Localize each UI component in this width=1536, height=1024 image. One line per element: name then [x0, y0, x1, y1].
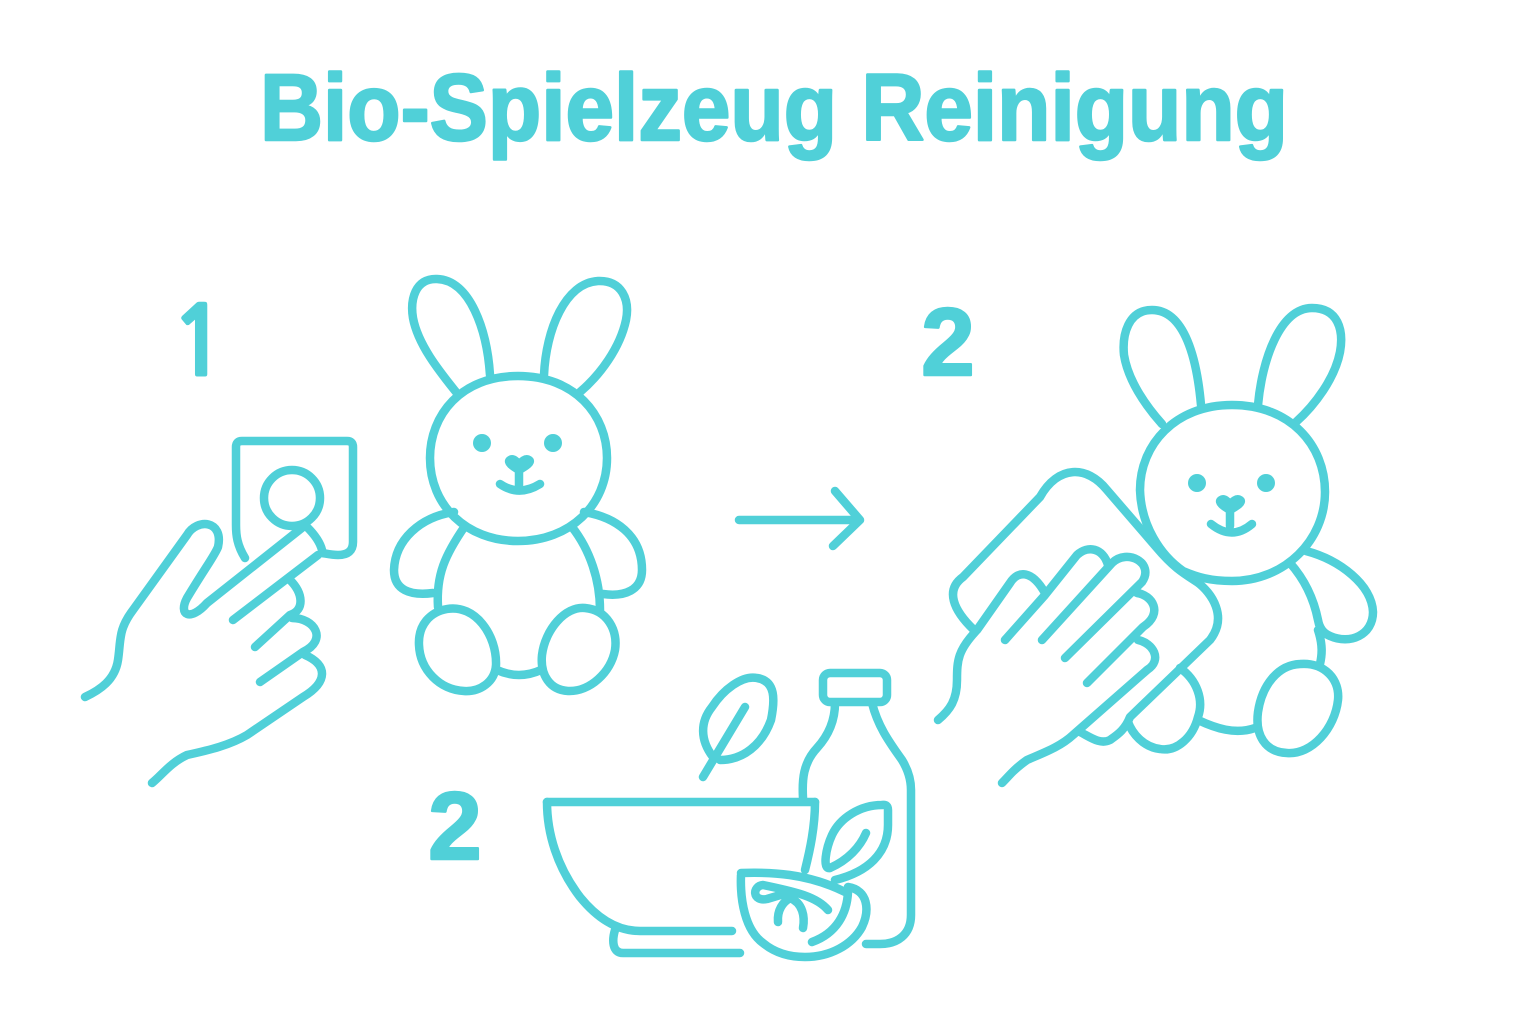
step number 2 bottom: 2	[428, 773, 482, 880]
icon: bunny toy	[394, 279, 642, 691]
bunny body and arms	[394, 512, 642, 675]
bunny feet	[1128, 664, 1338, 753]
bunny ears	[412, 279, 627, 392]
bunny face	[1188, 474, 1275, 532]
bowl	[547, 802, 815, 953]
arrow	[739, 491, 860, 546]
title: Bio-Spielzeug Reinigung	[260, 55, 1288, 161]
card with button	[236, 441, 353, 558]
bottle	[803, 673, 911, 944]
bunny head	[430, 376, 607, 541]
bunny arm and body	[1198, 551, 1373, 731]
hand	[938, 549, 1155, 783]
lemon slice	[741, 873, 866, 957]
step number 2 top right: 2	[921, 289, 975, 396]
step number 1: 1	[170, 295, 228, 390]
hand	[85, 524, 322, 783]
bunny head	[1140, 405, 1325, 581]
leaf beside bottle	[826, 805, 888, 880]
floating leaf	[703, 678, 773, 777]
bunny ears	[1124, 308, 1341, 424]
cloth	[953, 472, 1218, 742]
icon: bunny being wiped with cloth	[938, 308, 1373, 783]
bunny feet	[419, 608, 615, 691]
bunny face	[473, 434, 562, 490]
icon: bowl, bottle, leaves and lemon	[547, 673, 911, 957]
icon: hand pressing button on card	[85, 441, 353, 783]
